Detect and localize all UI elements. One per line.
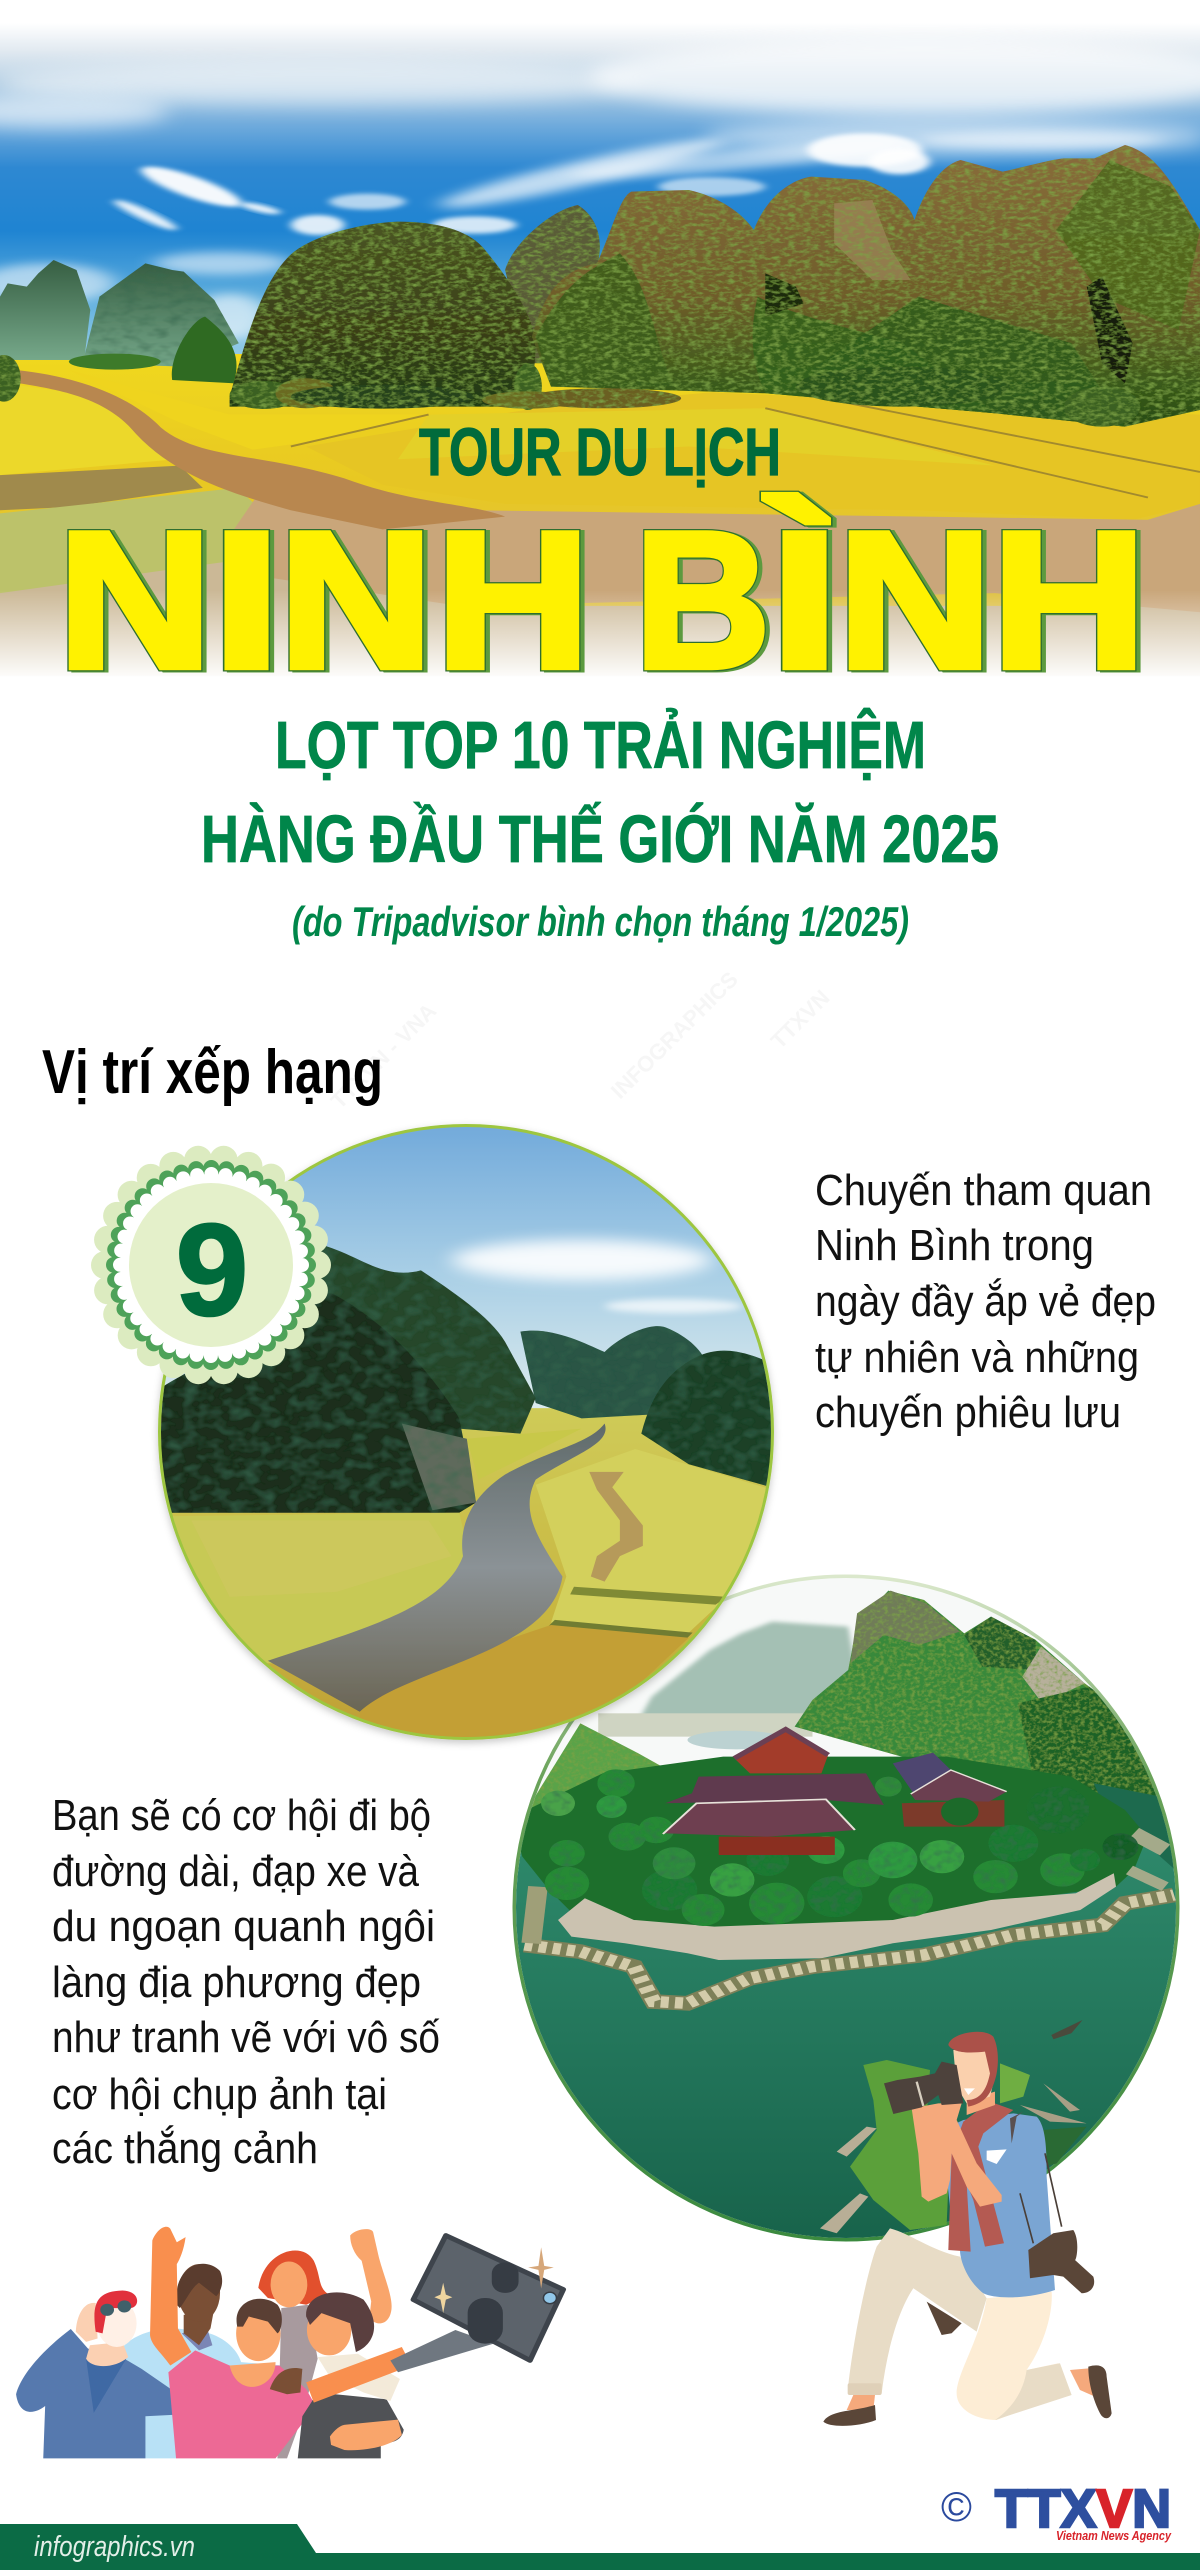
left rice field — [153, 1513, 468, 1663]
face — [953, 2050, 997, 2103]
lower golden field — [360, 1625, 689, 1745]
island land — [513, 1757, 1147, 1930]
large karst mountains — [230, 145, 1200, 427]
right description text: Chuyến tham quan — [815, 1166, 1152, 1215]
photo circle 1: Tam Coc valley — [145, 1117, 788, 1755]
inner disc — [129, 1183, 293, 1347]
hero photo: karst mountains over rice fields — [0, 0, 1200, 680]
neck — [967, 2092, 995, 2115]
rice fields and river — [0, 354, 1200, 676]
left leg — [848, 2228, 987, 2393]
faint watermarks: INFOGRAPHICS — [806, 1627, 943, 1764]
small boat — [1051, 2020, 1083, 2039]
hair and beard — [948, 2032, 998, 2107]
subtitle line 1: LỌT TOP 10 TRẢI NGHIỆM — [275, 708, 926, 783]
subtitle line 2: HÀNG ĐẦU THẾ GIỚI NĂM 2025 — [201, 802, 999, 877]
back man, light blue shirt — [119, 2328, 291, 2458]
photo contents — [500, 1570, 1200, 2253]
small boats near photographer — [820, 2127, 877, 2233]
title: Ninh Binh: N — [58, 492, 212, 709]
agency name: Vietnam News Agency — [1056, 2528, 1172, 2543]
title: Ninh Binh: B — [635, 492, 770, 709]
title: Ninh Binh: I — [216, 493, 285, 710]
phone — [413, 2235, 563, 2360]
photo contents — [145, 1117, 788, 1755]
white fade at bottom of photo — [0, 590, 1200, 680]
photo circle 2: Bai Dinh temple and lake — [500, 1570, 1200, 2253]
section heading: Vị trí xếp hạng — [42, 1038, 383, 1107]
ring — [161, 1127, 771, 1737]
title: Ninh Binh: H — [992, 492, 1146, 709]
title: Ninh Binh: I — [212, 492, 281, 709]
title: tour du lich: TOUR DU LỊCH — [419, 415, 781, 490]
title: Ninh Binh — [58, 492, 1150, 710]
right rice field — [536, 1449, 773, 1633]
left description text: như tranh vẽ với vô số — [52, 2013, 440, 2062]
red haired woman — [277, 2305, 318, 2458]
left description text: các thắng cảnh — [52, 2124, 318, 2173]
faint watermarks: TTXVN — [766, 985, 835, 1054]
center boy, pink shirt — [168, 2350, 316, 2458]
title: Ninh Binh: H — [436, 492, 590, 709]
temple right — [902, 1800, 1004, 1827]
title: Ninh Binh: N — [62, 493, 216, 710]
title: Ninh Binh: Ì — [769, 493, 843, 710]
left man, blue sweater — [16, 2329, 186, 2458]
selfie stick — [390, 2330, 494, 2372]
title: Ninh Binh: I — [212, 492, 281, 709]
upper clouds — [0, 38, 1200, 156]
right description text — [815, 1166, 1156, 1437]
selfie arm — [306, 2347, 411, 2403]
right description text: chuyến phiêu lưu — [815, 1388, 1121, 1437]
title: Ninh Binh: H — [440, 493, 594, 710]
scarf — [948, 2102, 1013, 2252]
title: Ninh Binh: N — [838, 492, 992, 709]
site label: infographics.vn — [34, 2531, 195, 2563]
footer band — [0, 2524, 1200, 2570]
title: Ninh Binh: N — [279, 492, 433, 709]
arm — [912, 2103, 1002, 2207]
green tab and bar — [0, 2524, 1200, 2570]
right description text: ngày đầy ắp vẻ đẹp — [815, 1277, 1156, 1326]
green shrub behind — [850, 2060, 950, 2230]
lake water — [500, 1823, 1200, 2253]
title: Ninh Binh: N — [58, 492, 212, 709]
green wavy ring — [114, 1168, 308, 1362]
left description text: đường dài, đạp xe và — [52, 1847, 419, 1896]
title: Ninh Binh: H — [436, 492, 590, 709]
right description text: Ninh Bình trong — [815, 1221, 1094, 1270]
shore promenade — [558, 1873, 1116, 1960]
temple main — [719, 1837, 835, 1855]
camera — [884, 2062, 963, 2114]
hand on shoulder — [270, 2368, 302, 2394]
title: Ninh Binh: Ì — [765, 492, 839, 709]
lower clouds — [0, 130, 1163, 340]
left description text — [52, 1791, 440, 2173]
wordmark: TTXVN — [995, 2479, 1171, 2539]
lens — [543, 2292, 556, 2304]
girl, dark shirt — [298, 2393, 404, 2458]
map-shaped path in field — [589, 1472, 643, 1582]
number: 9 — [176, 1196, 248, 1343]
sparkles — [528, 2247, 554, 2289]
faint watermarks — [326, 967, 943, 1764]
title: Ninh Binh: N — [838, 492, 992, 709]
far knee — [927, 2302, 962, 2335]
shoes and ankles — [847, 2395, 875, 2410]
faint watermarks: INFOGRAPHICS — [606, 967, 743, 1104]
illustration: photographer — [820, 2032, 1112, 2426]
hanging camera — [1020, 2153, 1062, 2243]
waving arm — [150, 2227, 191, 2366]
far hazy peaks, left — [0, 260, 239, 383]
raised arm right — [350, 2229, 392, 2323]
right leg — [957, 2292, 1067, 2420]
title: Ninh Binh: N — [842, 493, 996, 710]
moored boats — [525, 1833, 1174, 2003]
title: Ninh Binh: B — [635, 492, 770, 709]
source note: (do Tripadvisor bình chọn tháng 1/2025) — [292, 898, 909, 945]
faint watermarks: TTXVN - VNA — [326, 998, 441, 1114]
left description text: du ngoạn quanh ngôi — [52, 1902, 435, 1951]
left description text: làng địa phương đẹp — [52, 1958, 421, 2007]
river — [268, 1423, 606, 1712]
foreground shrubs — [0, 355, 1140, 427]
trees — [541, 1769, 1138, 1926]
rank badge: 9 — [105, 1159, 317, 1371]
title: Ninh Binh: H — [996, 493, 1150, 710]
shirt — [942, 2113, 1055, 2297]
copyright sign: © — [941, 2483, 972, 2530]
illustration: group selfie — [16, 2227, 563, 2458]
title: Ninh Binh: B — [639, 493, 774, 710]
title: Ninh Binh: H — [992, 492, 1146, 709]
left description text: cơ hội chụp ảnh tại — [52, 2070, 387, 2119]
left description text: Bạn sẽ có cơ hội đi bộ — [52, 1791, 431, 1840]
title: Ninh Binh: N — [283, 493, 437, 710]
outer ring — [515, 1577, 1177, 2239]
title: Ninh Binh: N — [279, 492, 433, 709]
title: Ninh Binh: Ì — [765, 492, 839, 709]
right description text: tự nhiên và những — [815, 1333, 1139, 1382]
logo: TTXVN — [941, 2479, 1172, 2543]
outer scalloped seal — [105, 1159, 317, 1371]
sky — [0, 0, 1200, 420]
